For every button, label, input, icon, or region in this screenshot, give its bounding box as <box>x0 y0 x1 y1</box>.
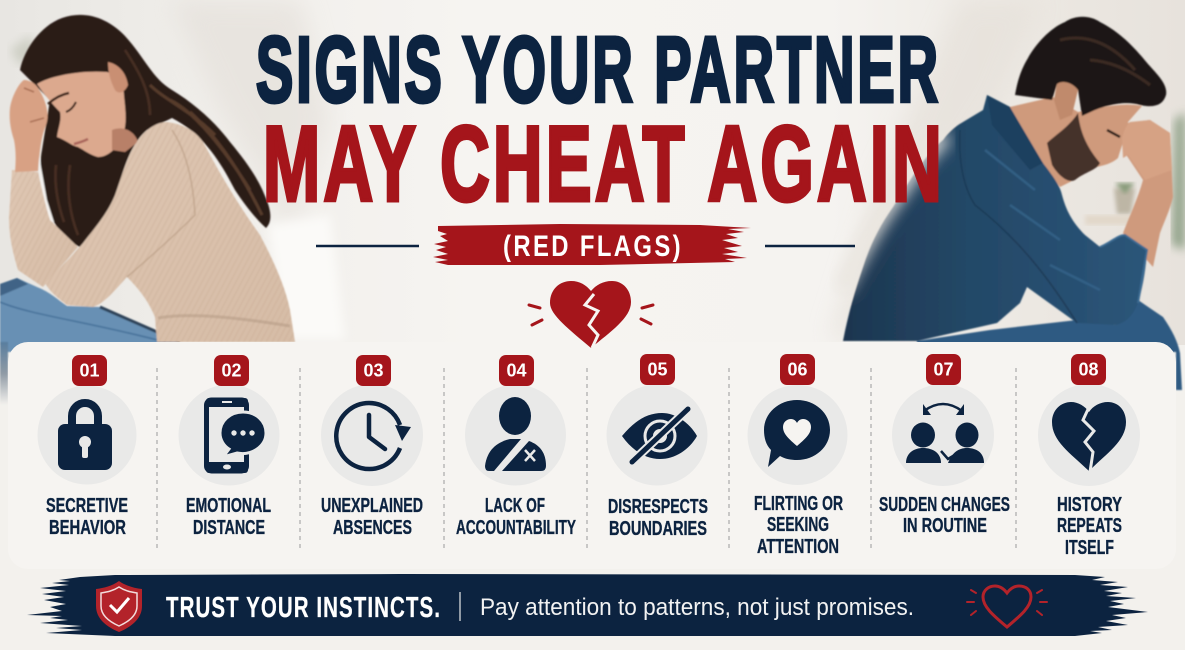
sign 02: emotional distance: EMOTIONAL <box>186 495 271 517</box>
sign 02: emotional distance: DISTANCE <box>193 517 265 539</box>
sign 03: unexplained absences: ABSENCES <box>333 517 412 539</box>
title <box>256 18 945 224</box>
photo: distressed man <box>840 17 1182 390</box>
sign 06: flirting or seeking attention: SEEKING <box>767 514 829 536</box>
photo: distressed woman <box>0 15 295 405</box>
sign 03: unexplained absences: 03 <box>364 360 384 380</box>
sign 07: sudden changes in routine: SUDDEN CHANGES <box>879 494 1010 516</box>
sign 04: lack of accountability: LACK OF <box>485 495 545 517</box>
sweater torso and arm <box>45 122 295 342</box>
sign 05: disrespects boundaries: BOUNDARIES <box>609 518 707 540</box>
sign 06: flirting or seeking attention: ATTENTION <box>757 536 839 558</box>
hair <box>20 15 270 247</box>
banner: trust your instincts: TRUST YOUR INSTINCTS. <box>166 592 441 624</box>
banner: trust your instincts: Pay attention to patterns, not just promises. <box>480 594 914 621</box>
jeans <box>0 278 180 360</box>
fist <box>1122 120 1172 180</box>
sign 08: history repeats itself: REPEATS <box>1057 515 1122 537</box>
sign 08: history repeats itself: HISTORY <box>1057 494 1122 516</box>
sign 06: flirting or seeking attention: FLIRTING OR <box>754 493 843 515</box>
sign 06: flirting or seeking attention: 06 <box>788 360 808 380</box>
sign 02: emotional distance: 02 <box>222 360 242 380</box>
soft fade on the shirt back <box>840 135 945 290</box>
sign 04: lack of accountability <box>456 355 576 539</box>
sign 05: disrespects boundaries <box>606 354 708 540</box>
shirt <box>843 95 1147 341</box>
icon: heart outline <box>967 586 1047 627</box>
sign 01: secretive behavior: 01 <box>80 360 100 380</box>
sign 03: unexplained absences <box>321 355 423 539</box>
sign 08: history repeats itself: 08 <box>1078 360 1098 380</box>
banner: trust your instincts <box>27 574 1148 636</box>
sign 08: history repeats itself: ITSELF <box>1065 537 1114 559</box>
face <box>37 72 126 157</box>
sign 06: flirting or seeking attention <box>748 354 848 558</box>
sign 03: unexplained absences: UNEXPLAINED <box>321 495 423 517</box>
sign 05: disrespects boundaries: DISRESPECTS <box>608 496 708 518</box>
white shirt under sleeve <box>38 150 54 222</box>
back sleeve <box>9 170 78 287</box>
neck and face <box>1010 97 1142 187</box>
sign 04: lack of accountability: 04 <box>506 360 526 380</box>
icon: shield <box>96 581 142 632</box>
sign 07: sudden changes in routine <box>879 354 1010 537</box>
hand <box>10 80 48 172</box>
sign 08: history repeats itself <box>1038 354 1140 559</box>
jeans <box>917 300 1182 390</box>
sign 05: disrespects boundaries: 05 <box>648 360 668 380</box>
sign 07: sudden changes in routine: IN ROUTINE <box>903 515 987 537</box>
sign 01: secretive behavior: SECRETIVE <box>46 495 128 517</box>
hair <box>1015 17 1166 116</box>
sign 04: lack of accountability: ACCOUNTABILITY <box>456 517 576 539</box>
icon: broken heart <box>529 281 653 348</box>
sign 01: secretive behavior <box>38 355 136 539</box>
panel: eight signs <box>8 342 1176 569</box>
sign 01: secretive behavior: BEHAVIOR <box>49 517 126 539</box>
sign 02: emotional distance <box>178 355 280 539</box>
subtitle brush: red flags: (RED FLAGS) <box>503 230 683 263</box>
subtitle brush: red flags <box>316 224 855 265</box>
beard <box>1047 113 1100 181</box>
sign 07: sudden changes in routine: 07 <box>934 360 954 380</box>
arm <box>1123 120 1173 267</box>
